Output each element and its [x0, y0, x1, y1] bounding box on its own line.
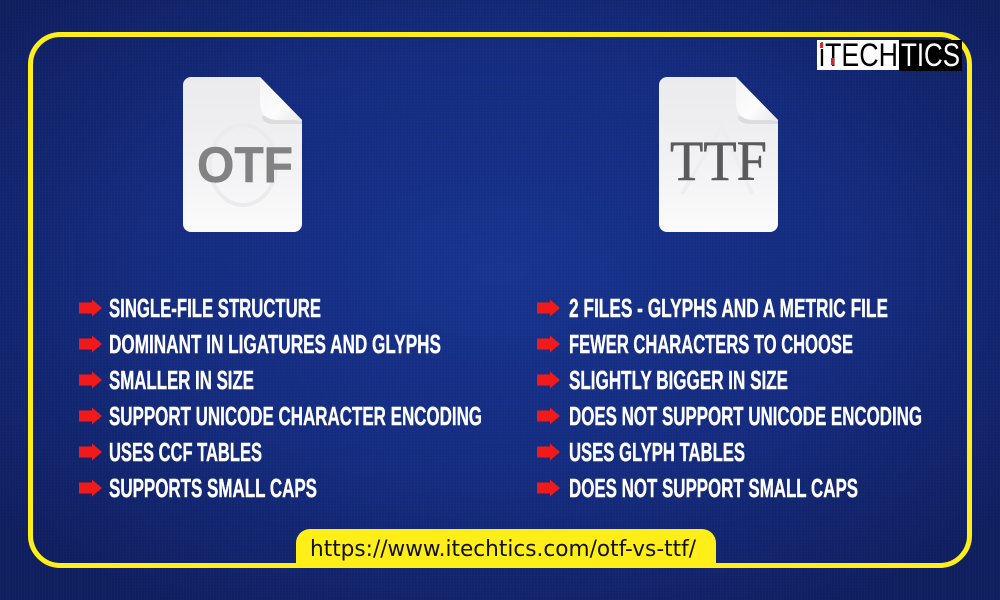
URL tab: [296, 529, 716, 568]
logo: iTechtics: TICS: [901, 37, 960, 73]
TTF item 3: SLIGHTLY BIGGER IN SIZE: [569, 365, 788, 395]
logo: iTechtics: iTECH: [819, 37, 898, 73]
TTF label: TTF: [670, 130, 767, 193]
OTF item 4: SUPPORT UNICODE CHARACTER ENCODING: [109, 401, 482, 431]
icon: OTF file: [183, 77, 302, 232]
OTF label: OTF: [197, 137, 293, 193]
OTF item 1: SINGLE-FILE STRUCTURE: [109, 293, 321, 323]
OTF item 5: [79, 437, 262, 467]
TTF item 5: [537, 437, 745, 467]
TTF item 2: [537, 329, 853, 359]
OTF item 5: USES CCF TABLES: [109, 437, 262, 467]
TTF feature list: [537, 293, 922, 503]
fold corner: [736, 77, 778, 120]
fold corner: [260, 77, 302, 120]
OTF item 3: SMALLER IN SIZE: [109, 365, 254, 395]
OTF feature list: [79, 293, 482, 503]
TTF item 6: [537, 473, 858, 503]
OTF item 2: DOMINANT IN LIGATURES AND GLYPHS: [109, 329, 441, 359]
OTF item 6: SUPPORTS SMALL CAPS: [109, 473, 317, 503]
OTF item 1: [79, 293, 321, 323]
icon: TTF file: [659, 77, 778, 232]
OTF item 4: [79, 401, 482, 431]
TTF item 1: [537, 293, 888, 323]
OTF item 6: [79, 473, 317, 503]
URL tab: https://www.itechtics.com/otf-vs-ttf/: [310, 537, 697, 562]
OTF item 3: [79, 365, 254, 395]
logo: iTechtics: [817, 37, 962, 73]
TTF item 5: USES GLYPH TABLES: [569, 437, 745, 467]
TTF item 3: [537, 365, 788, 395]
OTF item 2: [79, 329, 441, 359]
